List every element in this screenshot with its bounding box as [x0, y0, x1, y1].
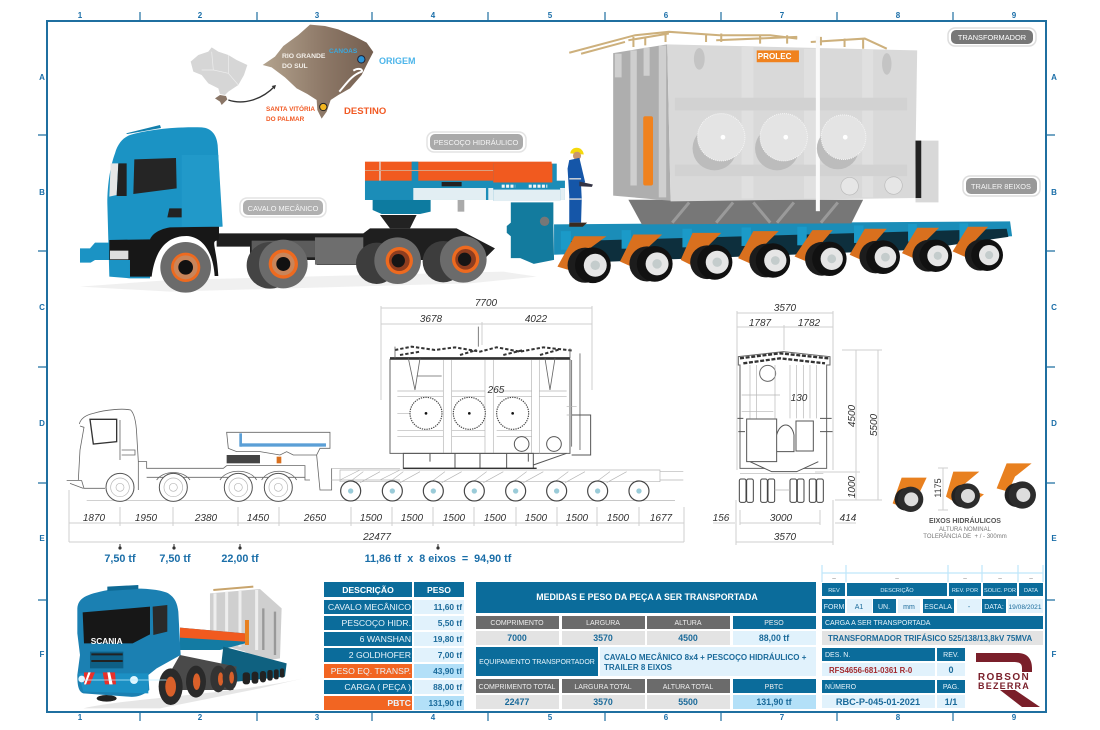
- Robson Bezerra logo: [976, 653, 1040, 707]
- dimension values: 1500: [566, 513, 589, 524]
- Robson Bezerra logo: ROBSON: [978, 672, 1030, 683]
- header: PESO: [427, 585, 451, 595]
- callout: pescoco hidraulico: [427, 132, 526, 152]
- map of Rio Grande do Sul: [263, 25, 373, 119]
- dimension values: 1782: [798, 318, 821, 329]
- PROLEC logo: PROLEC: [758, 52, 792, 61]
- dimension values: 1870: [83, 513, 106, 524]
- drawing frame with grid references: 3: [315, 11, 320, 20]
- table title: MEDIDAS E PESO DA PEÇA A SER TRANSPORTADA: [536, 592, 758, 602]
- rows: [324, 600, 464, 710]
- total dimensions: 3570: [593, 697, 613, 707]
- trailer chassis: [340, 470, 683, 483]
- revision table: [822, 565, 1043, 596]
- transport equipment: CAVALO MECÂNICO 8x4 + PESCOÇO HIDRÁULICO +: [604, 653, 807, 662]
- worker: [568, 148, 593, 227]
- cover plates: [693, 48, 902, 195]
- dimension values: 414: [840, 513, 857, 524]
- cab outline: [67, 409, 310, 490]
- axle loads: 11,86 tf x 8 eixos = 94,90 tf: [365, 553, 512, 565]
- title block: [822, 565, 1043, 708]
- dimension lines: [69, 306, 948, 545]
- end elevation technical drawing: [737, 352, 833, 502]
- map labels: ORIGEM: [379, 56, 416, 66]
- drawing numbers: 0: [948, 665, 954, 675]
- drawing frame with grid references: A: [39, 73, 45, 82]
- warning plates and lights: [84, 672, 116, 684]
- revision table: –: [998, 575, 1002, 582]
- table: weights: [324, 582, 464, 710]
- rows: CARGA ( PEÇA ): [344, 682, 411, 692]
- callout: cavalo mecanico: [240, 198, 326, 217]
- drawing frame with grid references: D: [39, 419, 45, 428]
- drawing frame with grid references: 1: [78, 713, 83, 722]
- drawing numbers: [822, 648, 965, 708]
- piece dimensions: 4500: [678, 633, 698, 643]
- drawing frame with grid references: 8: [896, 713, 901, 722]
- dimension values: 3570: [774, 532, 797, 543]
- piece dimensions: 88,00 tf: [759, 633, 789, 643]
- hydraulic axles illustration: ALTURA NOMINAL: [939, 527, 992, 533]
- dimension values: [83, 298, 943, 543]
- drawing numbers: REV.: [943, 652, 959, 659]
- load being transported: TRANSFORMADOR TRIFÁSICO 525/138/13,8kV 75MVA: [828, 634, 1032, 643]
- side elevation technical drawing: truck: [67, 409, 402, 501]
- drawing numbers: RBC-P-045-01-2021: [836, 697, 920, 707]
- Robson Bezerra logo: BEZERRA: [978, 681, 1030, 691]
- wheels: [160, 236, 487, 293]
- drawing frame with grid references: A: [1051, 73, 1057, 82]
- callout: transformador: TRANSFORMADOR: [958, 33, 1026, 42]
- drawing frame with grid references: C: [39, 303, 45, 312]
- rows: 131,90 tf: [428, 698, 462, 708]
- drawing numbers: 1/1: [945, 697, 957, 707]
- map labels: DESTINO: [344, 106, 386, 117]
- format row: 19/08/2021: [1008, 604, 1042, 611]
- dimension values: 1500: [443, 513, 466, 524]
- dimension values: 1500: [525, 513, 548, 524]
- cab: [77, 589, 181, 697]
- drawing frame with grid references: C: [1051, 303, 1057, 312]
- drawing frame with grid references: D: [1051, 419, 1057, 428]
- callout: trailer 8 eixos: TRAILER 8EIXOS: [971, 182, 1031, 191]
- revision table: –: [895, 575, 899, 582]
- hydraulic axles illustration: TOLERÂNCIA DE + / - 300mm: [923, 533, 1007, 540]
- dimension values: 4500: [847, 404, 858, 427]
- drawing frame with grid references: 4: [431, 11, 436, 20]
- format row: DATA:: [984, 604, 1004, 611]
- revision table: REV. POR: [952, 588, 978, 594]
- drawing frame with grid references: 9: [1012, 713, 1017, 722]
- revision table: SOLIC. POR: [984, 588, 1016, 594]
- total dimensions: ALTURA TOTAL: [663, 684, 713, 691]
- drawing frame with grid references: 4: [431, 713, 436, 722]
- drawing frame with grid references: 2: [198, 11, 203, 20]
- dimension values: 1500: [401, 513, 424, 524]
- drawing frame with grid references: B: [39, 188, 45, 197]
- dimension values: 3000: [770, 513, 793, 524]
- chassis: [217, 228, 495, 265]
- transformer tank: [613, 36, 938, 211]
- table: piece measures and weight: [476, 582, 816, 709]
- drawing frame with grid references: 8: [896, 11, 901, 20]
- rows: 43,90 tf: [433, 666, 462, 676]
- transformer: [210, 589, 282, 662]
- drawing numbers: DES. N.: [825, 652, 850, 659]
- PROLEC logo: [757, 50, 799, 62]
- dimension values: 3678: [420, 314, 443, 325]
- axle loads: [104, 544, 512, 565]
- gooseneck front end: [493, 164, 560, 201]
- rows: 6 WANSHAN: [360, 634, 411, 644]
- truck and transformer, three-quarter view: [77, 585, 303, 708]
- rows: PESO EQ. TRANSP.: [331, 666, 411, 676]
- rows: 11,60 tf: [434, 602, 462, 612]
- trailer deck: [554, 221, 1012, 263]
- piece dimensions: 7000: [507, 633, 527, 643]
- axle loads: 7,50 tf: [104, 553, 136, 565]
- revision table: –: [963, 575, 967, 582]
- drawing frame with grid references: F: [1052, 650, 1057, 659]
- total dimensions: LARGURA TOTAL: [574, 684, 632, 691]
- dimension values: 1677: [650, 513, 673, 524]
- ground shadow: [83, 678, 303, 708]
- piece dimensions: ALTURA: [674, 620, 702, 627]
- format row: FORM: [824, 604, 844, 611]
- dimension values: 1000: [847, 475, 858, 498]
- piece dimensions: COMPRIMENTO: [490, 620, 544, 627]
- drawing numbers: NÚMERO: [825, 682, 857, 691]
- axle loads: 7,50 tf: [159, 553, 191, 565]
- rows: CAVALO MECÂNICO: [328, 602, 411, 612]
- table title: [476, 582, 816, 613]
- front hitch: [80, 243, 109, 263]
- trailer neck: [507, 202, 554, 264]
- chassis and wheels: [147, 471, 305, 480]
- transport equipment: TRAILER 8 EIXOS: [604, 663, 673, 672]
- dimension values: 1500: [484, 513, 507, 524]
- piece dimensions: PESO: [764, 620, 784, 627]
- drawing frame with grid references: E: [39, 534, 45, 543]
- drawing frame with grid references: 1: [78, 11, 83, 20]
- axle wheels drawing: [739, 479, 823, 502]
- ground shadow: [80, 272, 537, 292]
- map of Brazil: [191, 47, 276, 105]
- total dimensions: COMPRIMENTO TOTAL: [479, 684, 556, 691]
- callout: trailer 8 eixos: [963, 176, 1040, 196]
- dimension values: 1500: [607, 513, 630, 524]
- drawing frame with grid references: 2: [198, 713, 203, 722]
- drawing frame with grid references: 6: [664, 713, 669, 722]
- map labels: DO PALMAR: [266, 116, 305, 123]
- drawing frame with grid references: F: [40, 650, 45, 659]
- header: [324, 582, 464, 597]
- rows: 88,00 tf: [433, 682, 462, 692]
- cab: [107, 127, 223, 278]
- dimension values: 156: [713, 513, 730, 524]
- truck tractor, side view: [80, 125, 537, 293]
- dimension values: 2380: [194, 513, 218, 524]
- dimension values: 1500: [360, 513, 383, 524]
- dimension values: 22477: [362, 532, 391, 543]
- transport equipment: EQUIPAMENTO TRANSPORTADOR: [479, 659, 595, 666]
- total dimensions: 22477: [505, 697, 529, 707]
- map labels: CANOAS: [329, 48, 358, 55]
- trailer: [180, 628, 245, 650]
- load being transported: [822, 616, 1043, 645]
- format row: -: [968, 604, 971, 611]
- rows: PBTC: [387, 698, 412, 708]
- dimension values: 1450: [247, 513, 270, 524]
- map labels: [266, 48, 416, 123]
- dimension values: 1950: [135, 513, 158, 524]
- total dimensions: 131,90 tf: [756, 697, 792, 707]
- route map: Brazil to Rio Grande do Sul: [191, 25, 416, 123]
- dimension values: 3570: [774, 303, 797, 314]
- tractor chassis wheels: [160, 655, 237, 690]
- dimension values: 5500: [869, 413, 880, 436]
- timber on transformer top: [569, 32, 887, 54]
- drawing frame with grid references: 6: [664, 11, 669, 20]
- total dimensions: [476, 679, 816, 709]
- drawing frame with grid references: 3: [315, 713, 320, 722]
- revision table: –: [832, 575, 836, 582]
- transport equipment: [476, 647, 816, 676]
- map labels: RIO GRANDE: [282, 53, 326, 60]
- drawing frame with grid references: B: [1051, 188, 1057, 197]
- total dimensions: PBTC: [765, 684, 783, 691]
- hydraulic axles: [557, 227, 1003, 283]
- callout: transformador: [948, 28, 1036, 46]
- drawing numbers: PAG.: [943, 684, 959, 691]
- trailer start: [332, 468, 400, 480]
- rows: 5,50 tf: [438, 618, 462, 628]
- drawing numbers: RFS4656-681-0361 R-0: [829, 666, 913, 675]
- drawing frame with grid references: 7: [780, 713, 785, 722]
- revision table: DATA: [1024, 588, 1038, 594]
- dimension values: 130: [791, 393, 808, 404]
- rows: PESCOÇO HIDR.: [341, 618, 411, 628]
- map labels: DO SUL: [282, 63, 308, 70]
- rows: 2 GOLDHOFER: [349, 650, 411, 660]
- total dimensions: 5500: [678, 697, 698, 707]
- transformer on the 8-axle trailer: [507, 32, 1012, 283]
- format row: UN.: [878, 604, 890, 611]
- drawing frame with grid references: 5: [548, 11, 553, 20]
- axle loads: 22,00 tf: [221, 553, 259, 565]
- dimension values: 1175: [933, 478, 943, 498]
- header: DESCRIÇÃO: [342, 585, 394, 595]
- revision table: DESCRIÇÃO: [880, 587, 914, 594]
- format row: A1: [855, 604, 863, 611]
- revision table: –: [1029, 575, 1033, 582]
- rows: 7,00 tf: [438, 650, 462, 660]
- callout: cavalo mecanico: CAVALO MECÂNICO: [248, 204, 319, 213]
- transformer base: [628, 200, 863, 224]
- piece dimensions: 3570: [593, 633, 613, 643]
- drawing frame with grid references: 9: [1012, 11, 1017, 20]
- load being transported: CARGA A SER TRANSPORTADA: [825, 620, 931, 627]
- drawing frame with grid references: 7: [780, 11, 785, 20]
- hydraulic axles illustration: [893, 463, 1036, 540]
- format row: ESCALA: [924, 604, 952, 611]
- hydraulic axles illustration: EIXOS HIDRÁULICOS: [929, 516, 1001, 525]
- map labels: SANTA VITÓRIA: [266, 104, 315, 113]
- rows: 19,80 tf: [433, 634, 462, 644]
- dimension values: 2650: [303, 513, 327, 524]
- dimension values: 7700: [475, 298, 498, 309]
- dimension values: 265: [487, 385, 505, 396]
- dimension values: 1787: [749, 318, 772, 329]
- hydraulic gooseneck: [365, 162, 565, 228]
- piece dimensions: [476, 616, 816, 645]
- dimension values: 4022: [525, 314, 548, 325]
- SCANIA badge: SCANIA: [91, 636, 123, 646]
- side elevation technical drawing: transformer and trailer: [340, 327, 683, 501]
- format row: [822, 599, 1043, 613]
- gooseneck drawing: [227, 432, 330, 455]
- callout: pescoco hidraulico: PESCOÇO HIDRÁULICO: [434, 138, 519, 147]
- revision table: REV: [828, 588, 840, 594]
- drawing frame with grid references: 5: [548, 713, 553, 722]
- transformer tank drawing: [390, 359, 570, 453]
- piece dimensions: LARGURA: [586, 620, 620, 627]
- format row: mm: [903, 604, 915, 611]
- orange cylinder: [643, 116, 653, 186]
- drawing frame with grid references: E: [1051, 534, 1057, 543]
- axle icons: [893, 463, 1036, 512]
